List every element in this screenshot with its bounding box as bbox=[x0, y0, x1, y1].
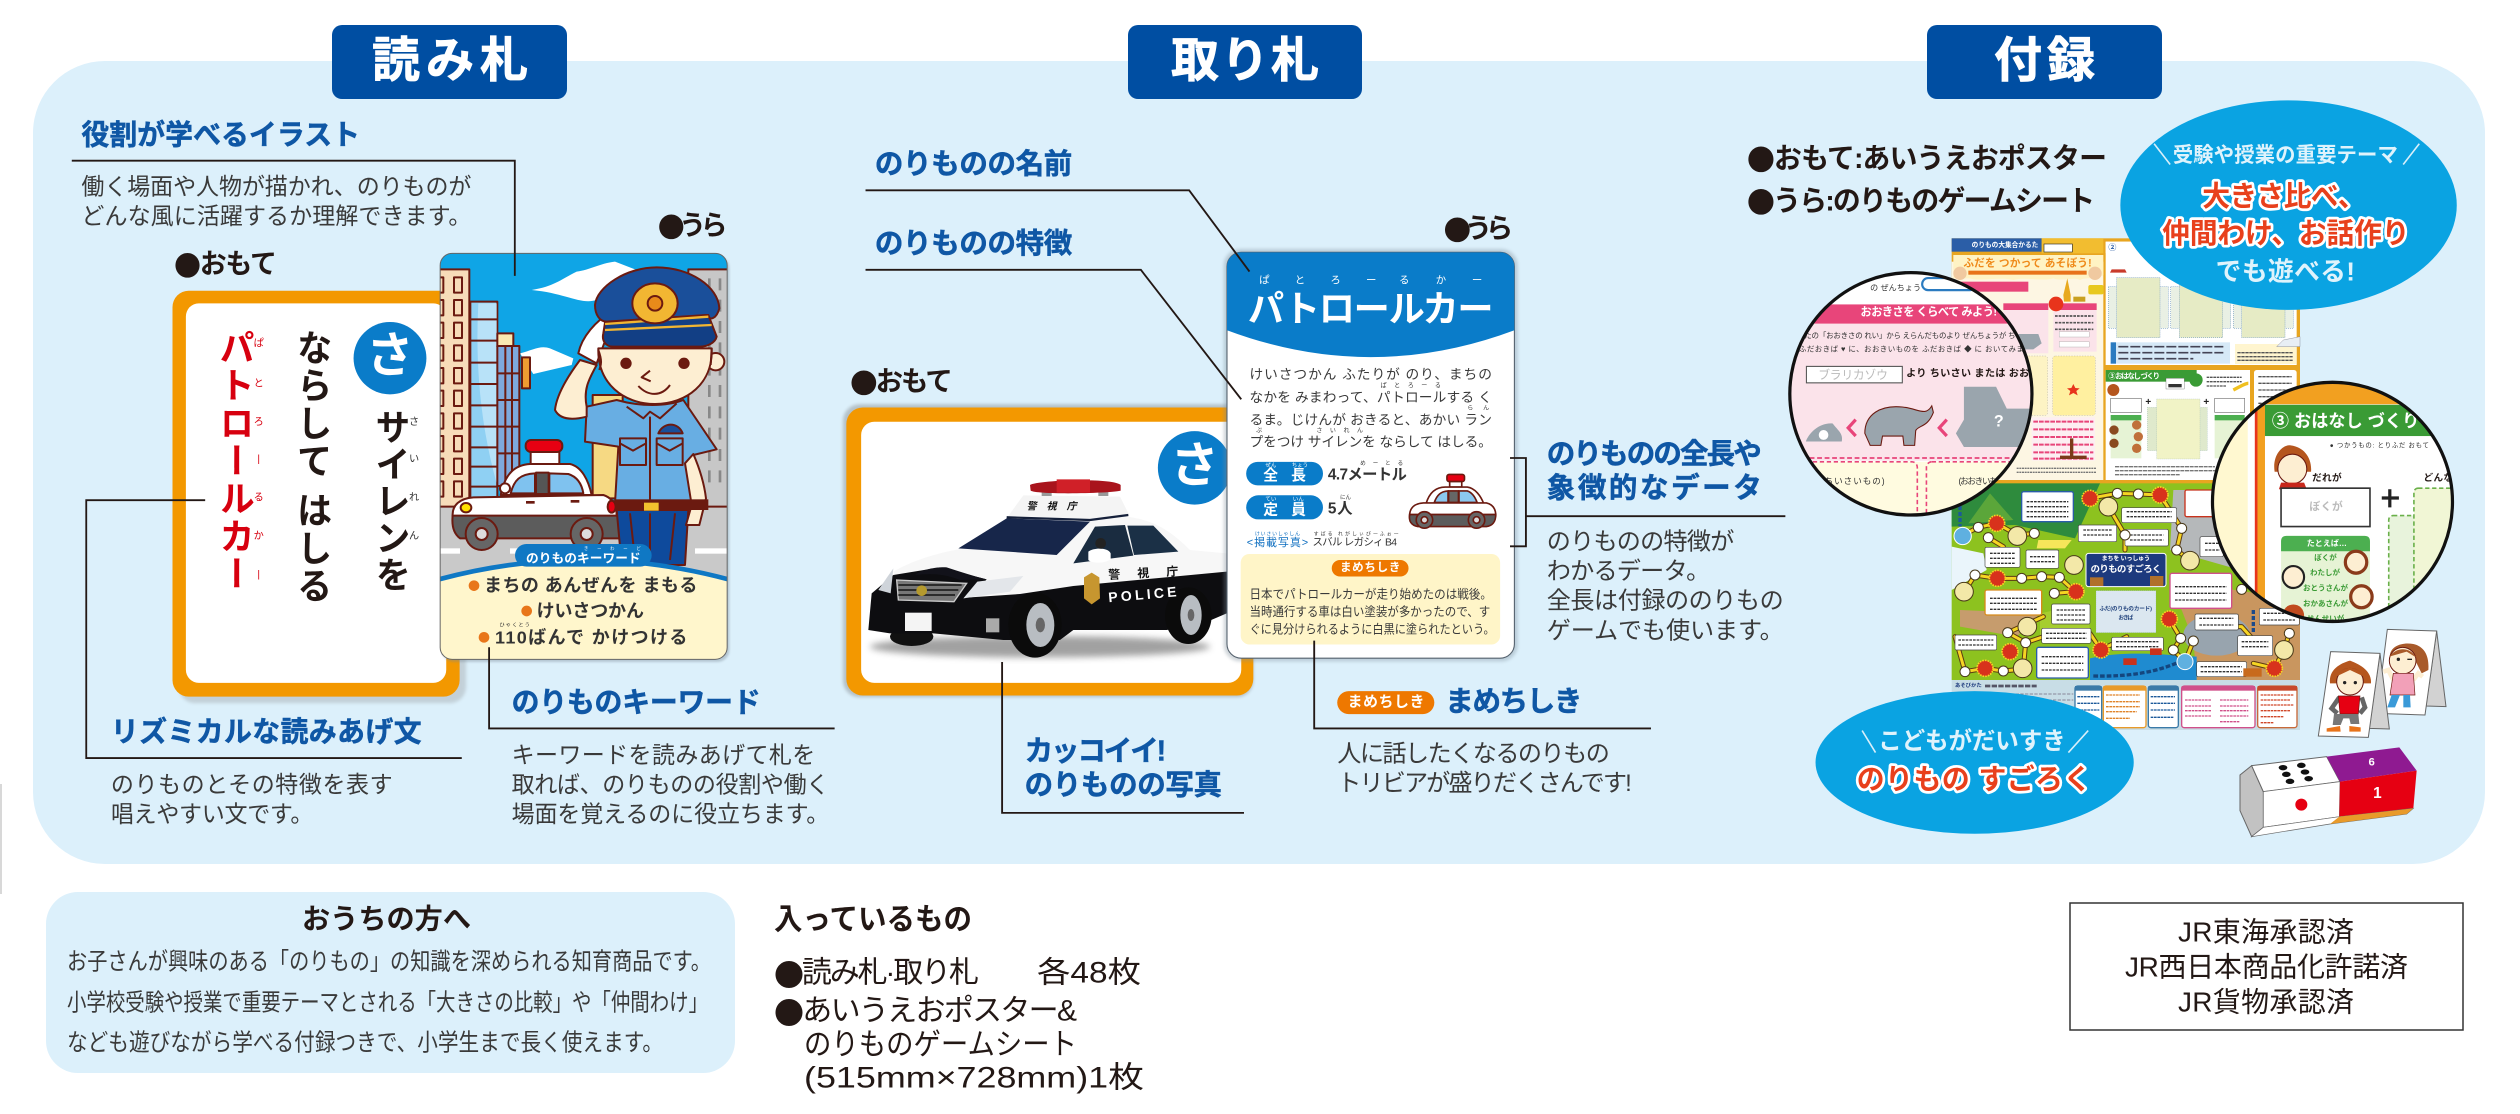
keyword lines bbox=[469, 576, 697, 647]
main light blue panel bbox=[33, 61, 2485, 864]
card header bbox=[1227, 252, 1514, 357]
poster: game board: のりものすごろく bbox=[2091, 563, 2161, 574]
data: length: ぜん bbox=[1265, 462, 1277, 469]
magnifier: story making: ぼくが bbox=[2314, 552, 2337, 562]
vehicle description: るま。じけんが おきると、あかい ラン bbox=[1249, 413, 1492, 428]
contents list: (515mm×728mm)1枚 bbox=[804, 1062, 1144, 1094]
panel: おうちの方へ: お子さんが興味のある「のりもの」の知識を深められる知育商品です。 bbox=[67, 948, 711, 976]
poster: game board: おきば bbox=[2118, 613, 2134, 621]
vehicle description: プをつけ サイレンを ならして はしる。 bbox=[1249, 435, 1492, 450]
callout: 全長データ: のりものの特徴が bbox=[1547, 528, 1734, 555]
keyword lines: ひゃくとう bbox=[499, 622, 530, 629]
speech bubble: すごろく bbox=[1816, 691, 2134, 834]
callout: リズミカルな読みあげ文: リズミカルな読みあげ文 bbox=[111, 715, 422, 747]
verse line 3: red name: パトロールカー bbox=[214, 329, 254, 591]
legend bbox=[1952, 680, 2300, 730]
magnifier: story making: どんな bbox=[2424, 471, 2453, 484]
photo: patrol car bbox=[868, 479, 1227, 658]
magnifier: story making: ③ おはなし づくり bbox=[2272, 411, 2419, 431]
callout: まめちしき: 人に話したくなるのりもの bbox=[1337, 741, 1610, 768]
furigana bbox=[254, 337, 420, 580]
callout: 全長データ: 象徴的なデータ bbox=[1547, 472, 1762, 505]
vehicle name: ー bbox=[1472, 275, 1482, 286]
poster: upper half: + bbox=[2145, 397, 2151, 408]
panel: おうちの方へ: 小学校受験や授業で重要テーマとされる「大きさの比較」や「仲間わけ」 bbox=[67, 990, 708, 1016]
black lower body bbox=[868, 567, 1227, 640]
panel: おうちの方へ bbox=[46, 892, 735, 1073]
buildings bbox=[438, 269, 469, 508]
trivia box: ぐに見分けられるように白黒に塗られたという。 bbox=[1249, 622, 1495, 637]
card back: police officer illustration bbox=[437, 253, 731, 663]
heading badge: 読み札: 読み札 bbox=[372, 34, 528, 88]
data: capacity: にん bbox=[1340, 494, 1351, 501]
route stops bbox=[1960, 488, 2294, 677]
callout: 役割が学べるイラスト: 役割が学べるイラスト bbox=[81, 118, 360, 151]
label: うら game sheet: ●うら:のりものゲームシート bbox=[1747, 179, 2095, 221]
icon: small patrol car bbox=[1409, 474, 1496, 528]
keyword pill: のりものキーワード bbox=[526, 551, 641, 565]
headlights bbox=[963, 576, 1023, 598]
data: length: 4.7メートル bbox=[1328, 467, 1407, 484]
vehicle name: と bbox=[1295, 274, 1305, 286]
vehicle description bbox=[1249, 367, 1492, 450]
approval notice box: JR西日本商品化許諾済 bbox=[2125, 952, 2408, 982]
callout: のりものの特徴 bbox=[866, 228, 1241, 399]
furigana: | bbox=[257, 569, 260, 580]
icon: さ circle bbox=[354, 322, 426, 394]
trivia box bbox=[1241, 554, 1500, 644]
comparison figures bbox=[1806, 423, 1842, 442]
magnifier: size comparison: の ぜんちょう bbox=[1870, 283, 1921, 293]
label: おもて poster: ●おもて:あいうえおポスター bbox=[1747, 137, 2107, 179]
callout: のりものキーワード: キーワードを読みあげて札を bbox=[512, 742, 815, 768]
poster: upper half: ② bbox=[2108, 243, 2116, 252]
windows bbox=[958, 518, 1090, 555]
section: 取り札 callouts bbox=[866, 149, 1785, 813]
callout: まめちしき: まめちしき bbox=[1445, 686, 1582, 718]
speech bubble: すごろく: のりもの すごろく bbox=[1857, 763, 2091, 795]
data: capacity: 定員 bbox=[1263, 502, 1306, 519]
vehicle description: けいさつかん ふたりが のり、まちの bbox=[1249, 367, 1492, 382]
clouds bbox=[532, 262, 637, 301]
card front: reading card bbox=[172, 291, 466, 703]
speech bubble: 重要テーマ: 仲間わけ、お話作り bbox=[2162, 217, 2410, 249]
magnifier: story making: だれが bbox=[2312, 471, 2342, 484]
magnifier: size comparison: おおきさを くらべて みよう! bbox=[1861, 306, 1997, 319]
vehicle name: る bbox=[1399, 274, 1409, 286]
callout: リズミカルな読みあげ文: のりものとその特徴を表す bbox=[111, 771, 393, 798]
photo credit: すばる れがしぃびーふぉー bbox=[1314, 530, 1399, 537]
board title bbox=[2086, 553, 2166, 587]
boy face bbox=[2274, 445, 2311, 472]
magnifier: size comparison: (おおきいもの) bbox=[1959, 476, 2007, 486]
data: length bbox=[1246, 460, 1407, 485]
card back: vehicle data card bbox=[1224, 249, 1518, 661]
section: 読み札 bbox=[172, 205, 727, 703]
callout: 写真: カッコイイ! bbox=[1025, 735, 1166, 767]
icon: さ circle: さ bbox=[366, 330, 414, 383]
data: length: めーとる bbox=[1360, 460, 1403, 467]
furigana: ろ bbox=[254, 417, 264, 428]
vehicle description: ぷ bbox=[1256, 428, 1262, 435]
furigana: ん bbox=[409, 530, 419, 542]
plate bbox=[905, 613, 932, 631]
photo credit: スバル レガシィ B4 bbox=[1313, 537, 1397, 549]
approval notice box bbox=[2070, 903, 2463, 1030]
stand-up character cards bbox=[2318, 629, 2446, 737]
magnifier: size comparison bbox=[1787, 273, 2043, 528]
second game panel bbox=[2106, 242, 2297, 365]
verse line 1: サイレンを bbox=[370, 409, 410, 592]
callout: まめちしき: まめちしき bbox=[1348, 694, 1424, 711]
contents list bbox=[774, 904, 1144, 1094]
furigana: さ bbox=[409, 416, 419, 428]
callout: 全長データ bbox=[1510, 439, 1785, 644]
hood dark cap bbox=[915, 567, 987, 580]
furigana: か bbox=[254, 530, 264, 542]
label: うら: ●うら bbox=[658, 205, 727, 245]
section: 取り札 bbox=[843, 208, 1513, 697]
callout: 写真: のりものの写真 bbox=[1025, 769, 1222, 801]
magnifier: size comparison: ブラリカゾウ bbox=[1818, 368, 1888, 382]
contents list: ●あいうえおポスター& bbox=[774, 989, 1077, 1033]
poster: upper half bbox=[1952, 238, 2300, 492]
poster: upper half: のりもの大集合かるた bbox=[1972, 240, 2039, 249]
furigana: れ bbox=[409, 491, 420, 504]
paper dice: 6 bbox=[2369, 757, 2375, 769]
callout: 全長データ: のりものの全長や bbox=[1547, 439, 1762, 471]
approval notice box: JR東海承認済 bbox=[2178, 916, 2354, 948]
keyword lines: 110ばんで かけつける bbox=[495, 627, 687, 647]
speech bubble: 重要テーマ bbox=[2120, 100, 2457, 310]
photo credit: <掲載写真> bbox=[1247, 535, 1308, 549]
label: おもて: ●おもて bbox=[174, 244, 277, 283]
white info cards bbox=[1955, 490, 2299, 678]
callout: 役割が学べるイラスト: 働く場面や人物が描かれ、のりものが bbox=[81, 173, 471, 200]
wheels bbox=[1008, 592, 1062, 658]
paper dice bbox=[2240, 747, 2417, 837]
icon: さ circle: さ bbox=[1171, 439, 1219, 493]
callout: のりものの名前: のりものの名前 bbox=[875, 149, 1072, 181]
poster: game board: まちを いっしゅう bbox=[2102, 554, 2150, 562]
white body bbox=[893, 517, 1227, 597]
roof sign bbox=[1008, 495, 1129, 518]
label: うら: ●うら bbox=[1444, 208, 1513, 248]
boy card bbox=[2318, 652, 2389, 737]
magnifier: size comparison: たの「おおきさの れい」から えらんだものより ぜんちょうが ちい bbox=[1804, 330, 2023, 340]
verse line 2: ならして はしる bbox=[292, 329, 332, 603]
heading badge: 付録: 付録 bbox=[1994, 34, 2095, 88]
data: capacity: 5人 bbox=[1328, 501, 1353, 518]
contents list: のりものゲームシート bbox=[804, 1028, 1077, 1062]
callout: のりものキーワード: 取れば、のりものの役割や働く bbox=[512, 771, 829, 798]
magnifier: story making: おとうさんが bbox=[2303, 582, 2348, 593]
speech bubble: 重要テーマ: 受験や授業の重要テーマ bbox=[2173, 144, 2398, 167]
poster: game board: あそびかた bbox=[1955, 681, 1982, 689]
trivia box: 日本でパトロールカーが走り始めたのは戦後。 bbox=[1249, 588, 1492, 602]
door text: 警 視 庁 bbox=[1108, 563, 1179, 582]
photo: patrol car: 警視庁 bbox=[1027, 500, 1079, 512]
mirror bbox=[1088, 549, 1111, 563]
furigana: る bbox=[254, 491, 264, 504]
magnifier: story making: ● つかうもの: とりふだ おもて bbox=[2330, 441, 2429, 449]
heading badge: 取り札 bbox=[1128, 25, 1362, 99]
furigana: い bbox=[409, 454, 419, 465]
panel: おうちの方へ: おうちの方へ bbox=[302, 904, 471, 934]
data: length: 全長 bbox=[1263, 466, 1306, 484]
magnifier: story making: わたしが bbox=[2310, 567, 2340, 577]
margin mark bbox=[0, 784, 2, 894]
officer bbox=[555, 267, 724, 565]
emblem bbox=[1084, 573, 1100, 604]
patrol car bbox=[452, 440, 620, 550]
data: capacity bbox=[1246, 494, 1353, 519]
callout: のりものの名前 bbox=[866, 149, 1249, 272]
callout: のりものキーワード bbox=[489, 647, 835, 827]
card front: photo card bbox=[843, 404, 1253, 697]
furigana: と bbox=[254, 377, 264, 390]
furigana: ぱ bbox=[254, 337, 265, 349]
keyword pill: きーわーど bbox=[584, 545, 641, 551]
callout: 全長データ: ゲームでも使います。 bbox=[1547, 617, 1784, 644]
callout: 全長データ: 全長は付録ののりもの bbox=[1547, 588, 1784, 615]
approval notice box: JR貨物承認済 bbox=[2178, 986, 2354, 1018]
heading badge: 読み札 bbox=[332, 25, 567, 99]
callout: のりものキーワード: 場面を覚えるのに役立ちます。 bbox=[512, 801, 829, 827]
poster: upper half: ③ おはなし づくり bbox=[2108, 371, 2160, 380]
section: 付録 labels bbox=[1747, 137, 2107, 221]
magnifier: size comparison: ? bbox=[1994, 412, 2004, 430]
keyword lines: まちの あんぜんを まもる bbox=[484, 576, 697, 596]
icon: さ circle bbox=[1158, 431, 1231, 505]
magnifier: story making: せんせいが bbox=[2307, 613, 2345, 623]
photo credit bbox=[1247, 530, 1399, 549]
vehicle description: ぱとろーる bbox=[1381, 383, 1441, 390]
vehicle description: なかを みまわって、パトロールする く bbox=[1249, 390, 1492, 405]
magnifier: story making bbox=[2210, 378, 2464, 629]
vehicle description: さいれん bbox=[1316, 428, 1363, 435]
yellow route bbox=[1955, 493, 2289, 672]
heading badge: 付録 bbox=[1927, 25, 2162, 99]
data: capacity: てい bbox=[1265, 496, 1277, 503]
story panel bbox=[2106, 370, 2250, 480]
paper dice: 1 bbox=[2373, 785, 2382, 802]
contents list: 入っているもの bbox=[774, 904, 972, 936]
magnifier: size comparison: ちいさいもの) bbox=[1825, 476, 1885, 486]
light bar bbox=[1030, 480, 1121, 493]
callout: リズミカルな読みあげ文: 唱えやすい文です。 bbox=[111, 801, 313, 827]
magnifier: story making: たとえば… bbox=[2307, 538, 2347, 548]
data: length: ちょう bbox=[1292, 462, 1308, 469]
contents list: 各48枚 bbox=[1037, 956, 1141, 990]
furigana: | bbox=[257, 454, 260, 465]
callout: まめちしき bbox=[1314, 641, 1651, 797]
trivia box: 当時通行する車は白い塗装が多かったので、す bbox=[1249, 604, 1490, 619]
contents list: ●読み札·取り札 bbox=[774, 951, 979, 995]
magnifier: size comparison: ふだおきば ♥ に、おおきいものを ふだおきば ◆ に おいてみま bbox=[1799, 344, 2024, 353]
callout: まめちしき: トリビアが盛りだくさんです! bbox=[1337, 770, 1632, 797]
photo credit: けいさいしゃしん bbox=[1255, 530, 1300, 537]
poster: game board bbox=[1952, 483, 2300, 730]
callout: 全長データ: わかるデータ。 bbox=[1547, 558, 1710, 585]
magnifier: story making: おかあさんが bbox=[2303, 598, 2348, 608]
speech bubble: すごろく: こどもがだいすき bbox=[1878, 727, 2066, 755]
vehicle name: パトロールカー bbox=[1248, 288, 1494, 329]
magnifier: story making: ぼくが bbox=[2309, 499, 2343, 513]
ground bbox=[440, 508, 727, 576]
grille bbox=[897, 580, 967, 602]
data: capacity: いん bbox=[1293, 496, 1304, 503]
poster: upper half: + bbox=[2203, 397, 2209, 408]
keyword pill bbox=[515, 544, 652, 567]
magnifier: size comparison: より ちいさい または おお bbox=[1906, 368, 2029, 380]
vehicle name: ろ bbox=[1330, 275, 1341, 286]
keyword lines: けいさつかん bbox=[537, 601, 644, 621]
callout: 写真 bbox=[1002, 662, 1244, 813]
callout: のりものの特徴: のりものの特徴 bbox=[875, 228, 1073, 260]
vehicle name: か bbox=[1436, 274, 1447, 286]
trivia box: まめちしき bbox=[1340, 561, 1400, 574]
callout: のりものキーワード: のりものキーワード bbox=[512, 686, 761, 718]
poster: upper half: ふだを つかって あそぼう! bbox=[1963, 256, 2092, 269]
vehicle description: らん bbox=[1467, 405, 1489, 412]
callout: リズミカルな読みあげ文 bbox=[86, 500, 462, 827]
callout: 役割が学べるイラスト bbox=[72, 118, 515, 276]
poster: game board: ふだ(のりものカード) bbox=[2099, 604, 2152, 612]
section: 読み札 callouts bbox=[72, 118, 835, 827]
POLICE text: POLICE bbox=[1108, 583, 1177, 605]
vehicle name: ぱ bbox=[1259, 274, 1270, 286]
heading badge: 取り札: 取り札 bbox=[1171, 34, 1319, 88]
label: おもて: ●おもて bbox=[850, 361, 953, 401]
callout: 役割が学べるイラスト: どんな風に活躍するか理解できます。 bbox=[81, 203, 471, 229]
speech bubble: 重要テーマ: 大きさ比べ、 bbox=[2202, 180, 2366, 212]
vehicle name: ー bbox=[1366, 275, 1376, 286]
speech bubble: 重要テーマ: でも遊べる! bbox=[2216, 256, 2355, 287]
panel: おうちの方へ: なども遊びながら学べる付録つきで、小学生まで長く使えます。 bbox=[67, 1030, 663, 1056]
keyword arc bbox=[437, 560, 731, 663]
examples box bbox=[2281, 551, 2370, 620]
girl card bbox=[2377, 629, 2446, 715]
